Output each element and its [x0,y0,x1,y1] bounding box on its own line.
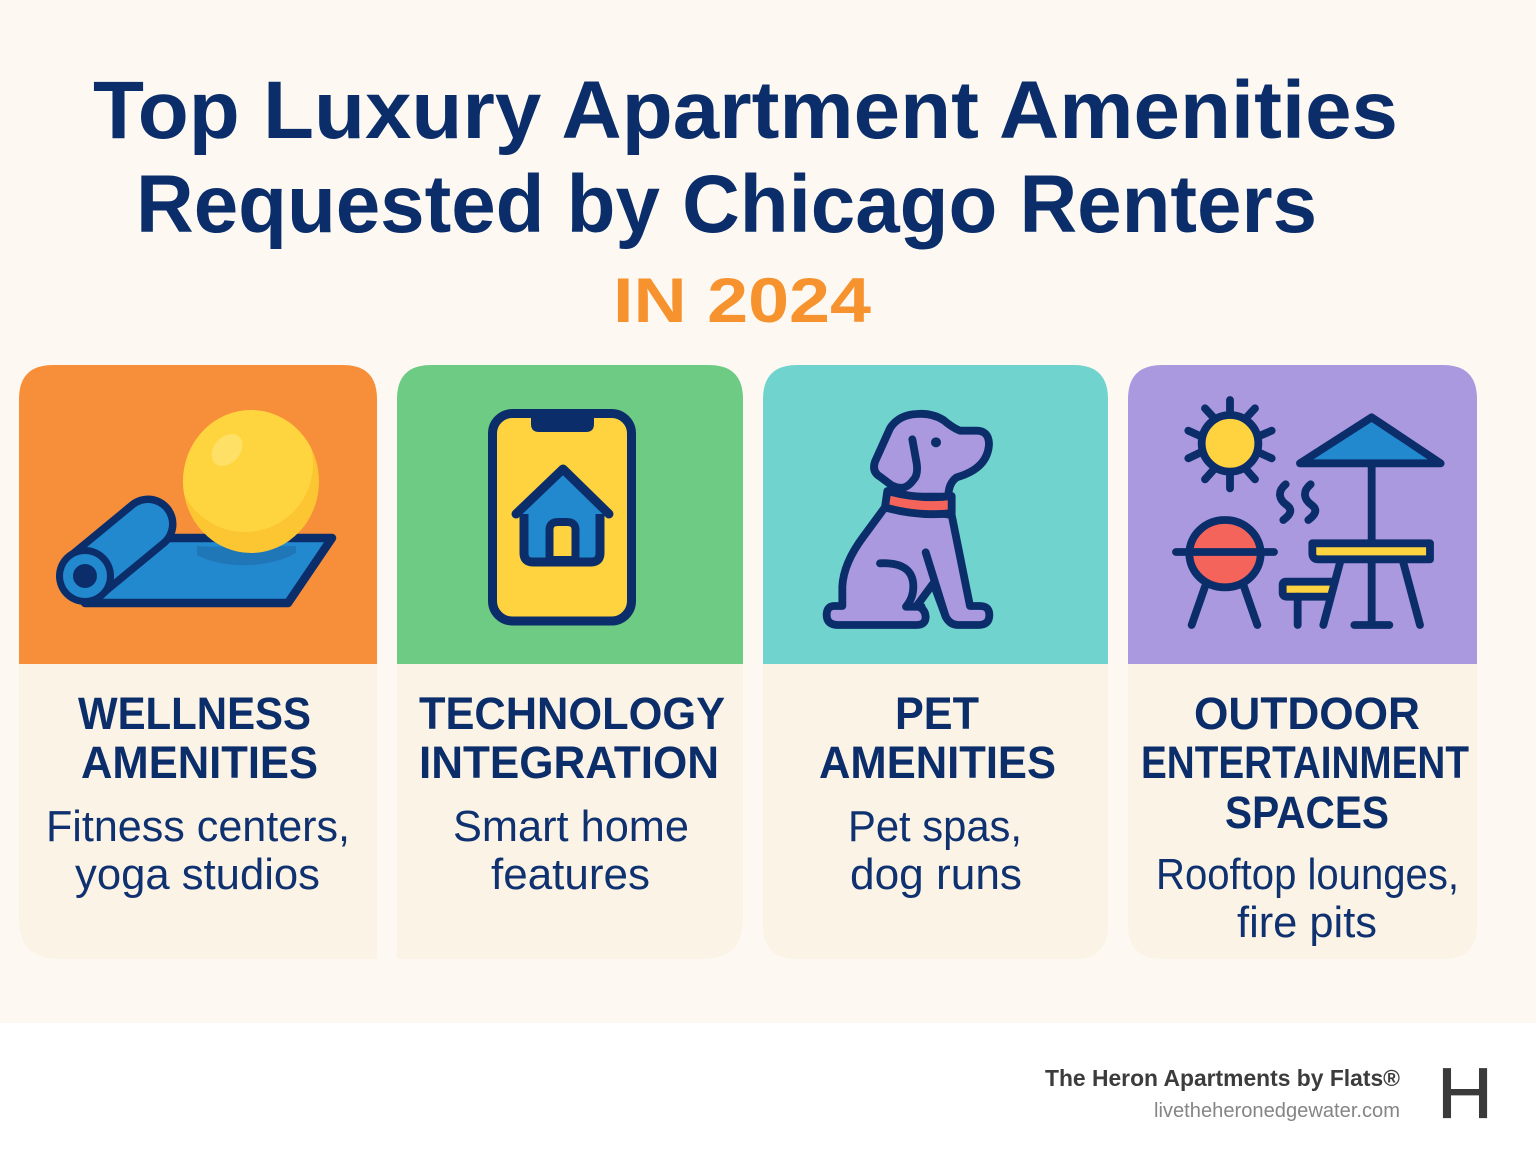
heading: WELLNESS [78,688,311,739]
panel body [19,664,377,959]
description [848,802,1022,899]
heading: INTEGRATION [419,737,719,788]
panel header [1128,365,1477,664]
heading: OUTDOOR [1194,688,1420,739]
heading [819,688,1056,788]
description [453,802,689,899]
panel: pet amenities [763,365,1108,959]
panel header [763,365,1108,664]
description [1156,850,1459,947]
description: yoga studios [75,850,320,899]
heading: PET [895,688,979,739]
title [93,65,1398,250]
footer website: livetheheronedgewater.com [1154,1099,1400,1122]
icon: grill [1176,520,1274,625]
title: Requested by Chicago Renters [136,159,1317,250]
icon: sitting dog [827,414,989,625]
panel body [1128,664,1477,959]
description: Smart home [453,802,689,851]
panel body [397,664,743,959]
description: Pet spas, [848,802,1022,851]
heading [1141,688,1469,838]
panel: technology integration [397,365,743,959]
panel body [763,664,1108,959]
footer brand name: The Heron Apartments by Flats® [1045,1065,1400,1091]
icon: sun [1188,400,1272,488]
panel header [397,365,743,664]
icon: umbrella table [1283,417,1441,625]
description: features [491,850,650,899]
heading: TECHNOLOGY [419,688,725,739]
panel: wellness amenities [19,365,377,959]
description: Rooftop lounges, [1156,850,1459,899]
icon: yoga mat and ball [56,396,332,605]
logo: H: H [1437,1055,1493,1134]
heading [419,688,725,788]
icon: patio with sun, grill and umbrella table [1176,400,1441,625]
heading [78,688,318,788]
heading: SPACES [1225,787,1389,838]
description: dog runs [850,850,1022,899]
description [46,802,350,899]
panel header [19,365,377,664]
description: Fitness centers, [46,802,350,851]
heading: ENTERTAINMENT [1141,737,1469,788]
subtitle: year: IN 2024 [613,266,871,336]
description: fire pits [1237,898,1377,947]
heading: AMENITIES [819,737,1056,788]
icon: smartphone with house [492,412,632,621]
footer [0,1023,1536,1154]
heading: AMENITIES [81,737,318,788]
title: Top Luxury Apartment Amenities [93,65,1398,156]
panel: outdoor entertainment spaces [1128,365,1477,959]
icon: steam [1280,484,1315,520]
